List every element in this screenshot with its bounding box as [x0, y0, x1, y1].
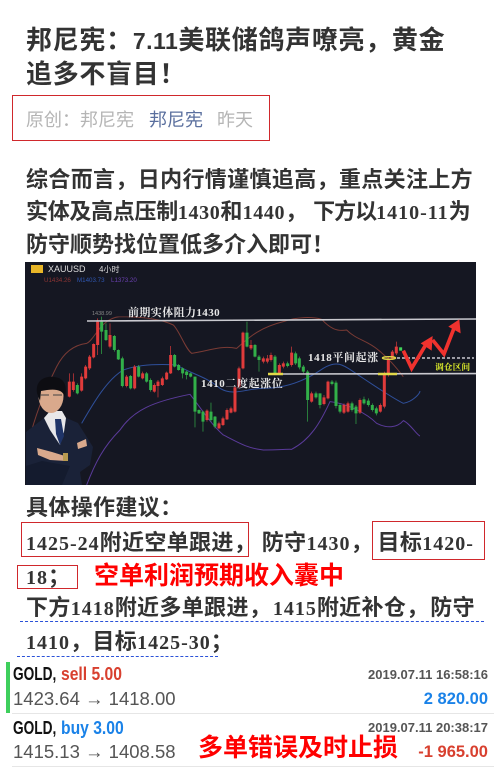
yellow level markers [268, 357, 397, 374]
chart labels [128, 305, 470, 390]
operation heading: 具体操作建议： [26, 495, 182, 520]
trade row: buy: buy 3.00 [61, 718, 124, 738]
platform header [31, 264, 137, 317]
platform header: 1438.99 [92, 311, 112, 317]
trade row: buy: -1 965.00 [418, 743, 488, 761]
resistance and support lines [87, 319, 476, 374]
short order line [21, 521, 485, 560]
trade row: sell: 2 820.00 [424, 690, 488, 708]
trade row: buy [12, 718, 494, 767]
trade row: sell [6, 662, 494, 714]
chart labels: 1418平间起涨 [308, 350, 379, 364]
byline box: 原创：邦尼宪 [26, 110, 134, 130]
platform header: M1403.73 [77, 277, 105, 284]
long order text: 1410，目标1425-30； [26, 629, 233, 654]
byline box [12, 95, 270, 141]
red callout: long stop loss: 多单错误及时止损 [198, 734, 398, 762]
summary text: 实体及高点压制1430和1440，下方以1410-11为 [26, 199, 471, 224]
chart labels: 调仓区间 [435, 361, 470, 372]
trade row: sell: sell 5.00 [61, 664, 122, 684]
price plot [27, 317, 476, 485]
summary text: 综合而言，日内行情谨慎追高，重点关注上方 [26, 167, 473, 192]
candles [69, 317, 255, 432]
chart labels: 1410二度起涨位 [201, 376, 283, 390]
trade row: buy: 2019.07.11 20:38:17 [368, 720, 488, 735]
platform header: XAUUSD [48, 264, 86, 274]
trade row: sell: GOLD, [13, 664, 56, 684]
title: 邦尼宪：7.11美联储鸽声嘹亮，黄金 [26, 25, 445, 55]
long order text: 下方1418附近多单跟进，1415附近补仓，防守 [26, 595, 475, 620]
platform header: U1434.26 [44, 277, 71, 284]
box: entry [21, 522, 249, 557]
platform header: 4小时 [99, 264, 119, 274]
candlestick chart [25, 262, 476, 485]
long order text [17, 595, 484, 657]
trade row: buy: GOLD, [13, 718, 56, 738]
presenter portrait [26, 377, 93, 485]
chart labels: 前期实体阻力1430 [128, 305, 220, 319]
red callout: short profit: 空单利润预期收入囊中 [94, 562, 344, 590]
box: target [372, 521, 485, 560]
short order target continued: 18； [26, 564, 70, 589]
platform header: L1373.20 [111, 277, 137, 284]
trade row: buy: 1415.13 → 1408.58 [13, 741, 176, 762]
summary text [26, 167, 473, 257]
trade row: sell: 1423.64 → 1418.00 [13, 688, 176, 709]
trade row: sell: 2019.07.11 16:58:16 [368, 667, 488, 682]
title [26, 25, 445, 89]
title: 追多不盲目！ [26, 59, 186, 89]
byline box: 昨天 [217, 110, 253, 130]
short order line: 1425-24附近空单跟进，防守1430，目标1420- [26, 530, 474, 555]
red forecast arrows [403, 319, 461, 368]
bollinger bands [27, 317, 420, 485]
summary text: 防守顺势找位置低多介入即可！ [26, 232, 334, 257]
byline box: 邦尼宪 [149, 110, 203, 130]
